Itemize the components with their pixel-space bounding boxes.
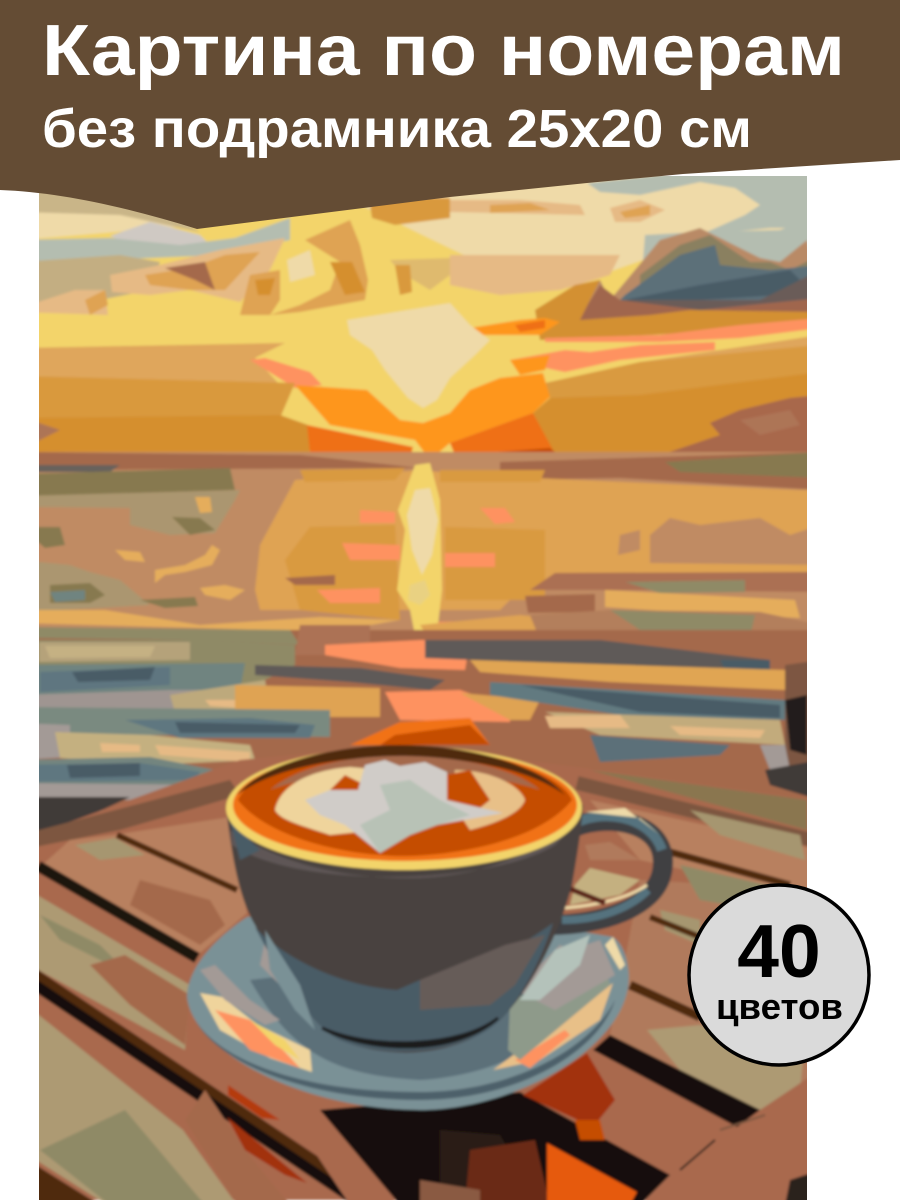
- cup body: [226, 805, 583, 1053]
- wooden table: [20, 745, 820, 1200]
- badge: 40 colours: 40: [737, 909, 821, 993]
- water bands: [20, 625, 820, 835]
- subtitle: без подрамника 25х20 см: [42, 99, 752, 159]
- coffee surface: [226, 745, 582, 870]
- saucer: [187, 900, 629, 1110]
- painting: coffee cup at sunset: [20, 160, 820, 1200]
- sky: [39, 176, 807, 454]
- header banner: [0, 0, 900, 229]
- title: Картина по номерам: [42, 11, 845, 91]
- badge: 40 colours: [689, 885, 869, 1065]
- sea: [39, 449, 807, 632]
- badge: 40 colours: цветов: [716, 986, 843, 1027]
- cup handle: [550, 808, 663, 925]
